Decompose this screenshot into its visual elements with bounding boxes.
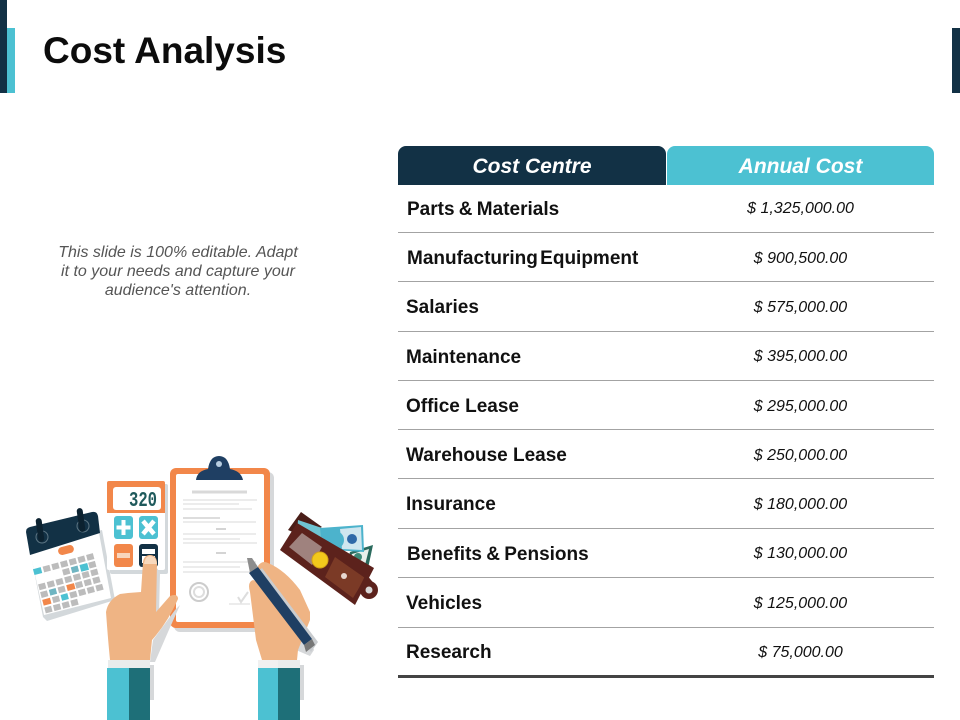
title: Cost Analysis	[43, 30, 286, 71]
row: manufacturing equipment: Manufacturing Equipment	[407, 248, 638, 269]
header: annual cost	[667, 146, 934, 185]
value: vehicles: $ 125,000.00	[754, 595, 847, 612]
illustration: hands with clipboard, calculator, calendar and wallet	[26, 456, 378, 720]
value: parts and materials: $ 1,325,000.00	[747, 200, 854, 217]
icon: clipboard	[170, 456, 274, 632]
row: research: Research	[406, 642, 492, 663]
row: office lease: Office Lease	[406, 396, 519, 417]
value: benefits and pensions: $ 130,000.00	[754, 545, 847, 562]
description text	[58, 244, 298, 299]
header: cost centre	[398, 146, 666, 185]
calculator display: 320	[129, 490, 157, 513]
header: cost centre: Cost Centre	[472, 155, 592, 178]
icon: right hand, sleeve and pen	[247, 558, 318, 720]
value: office lease: $ 295,000.00	[754, 398, 847, 415]
value: warehouse lease: $ 250,000.00	[754, 447, 847, 464]
left accent bar	[0, 0, 15, 93]
row: insurance: Insurance	[406, 494, 496, 515]
icon: wallet	[280, 512, 378, 605]
row: parts and materials: Parts & Materials	[407, 199, 559, 220]
value: maintenance: $ 395,000.00	[754, 348, 847, 365]
description text: audience's attention.	[105, 282, 251, 299]
right accent bar	[952, 28, 960, 93]
icon: calendar	[26, 508, 115, 621]
header: annual cost: Annual Cost	[739, 155, 862, 178]
description text: This slide is 100% editable. Adapt	[58, 244, 298, 261]
row: benefits and pensions: Benefits & Pensions	[407, 544, 589, 565]
value: research: $ 75,000.00	[758, 644, 843, 661]
row: vehicles: Vehicles	[406, 593, 482, 614]
value: manufacturing equipment: $ 900,500.00	[754, 250, 847, 267]
row: salaries: Salaries	[406, 297, 479, 318]
row: warehouse lease: Warehouse Lease	[406, 445, 567, 466]
table: cost centres	[398, 146, 934, 185]
value: insurance: $ 180,000.00	[754, 496, 847, 513]
row: maintenance: Maintenance	[406, 347, 521, 368]
icon: left hand and sleeve	[106, 555, 180, 720]
value: salaries: $ 575,000.00	[754, 299, 847, 316]
description text: it to your needs and capture your	[61, 263, 295, 280]
icon: calculator	[107, 481, 168, 574]
